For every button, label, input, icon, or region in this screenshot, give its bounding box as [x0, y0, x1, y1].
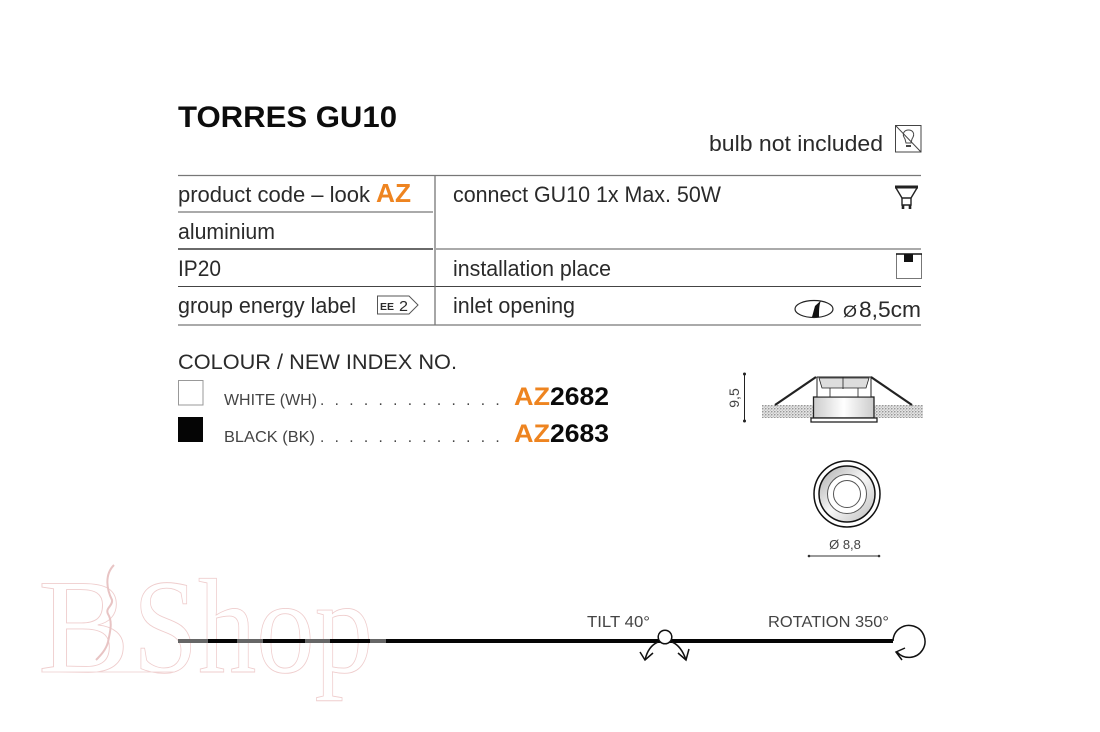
height dimension: 9,5 — [726, 388, 742, 408]
inlet opening row: inlet opening — [453, 293, 575, 318]
colour row: white: AZ — [514, 383, 550, 411]
colour row: black: AZ — [514, 420, 550, 448]
colour row: white: . . . . . . . . . . . . . — [320, 392, 507, 409]
colour row: black: 2683 — [550, 420, 609, 448]
colour row: black — [178, 417, 609, 448]
fitting body — [775, 377, 912, 422]
rotation label: ROTATION 350° — [768, 614, 889, 631]
inlet diameter value: 8,5cm — [859, 297, 921, 322]
icon: GU10 bulb — [895, 187, 918, 209]
front view drawing — [814, 461, 880, 527]
icon: energy label EE 2: EE — [380, 301, 394, 313]
adjustment axis line — [178, 639, 893, 643]
specification table — [178, 175, 922, 325]
product code row: product code – look — [178, 182, 371, 207]
bulb not included note: bulb not included — [709, 131, 883, 156]
colour row: white: 2682 — [550, 383, 609, 411]
icon: energy label EE 2: 2 — [399, 298, 408, 315]
material row: aluminium — [178, 219, 275, 244]
icon: ceiling installation — [896, 254, 922, 278]
tilt label: TILT 40° — [587, 614, 650, 631]
height dimension — [726, 372, 746, 422]
installation row: installation place — [453, 256, 611, 281]
diameter dimension — [808, 537, 880, 557]
watermark: BShop logo — [38, 553, 373, 702]
watermark: BShop logo: B — [38, 553, 130, 702]
connection row: connect GU10 1x Max. 50W — [453, 182, 721, 207]
energy label row: group energy label — [178, 293, 356, 318]
protection rating row: IP20 — [178, 256, 221, 281]
ceiling — [762, 405, 923, 418]
diameter dimension: Ø 8,8 — [829, 537, 861, 552]
icon: tilt arrows — [640, 630, 689, 660]
colour row: black: . . . . . . . . . . . . . — [320, 429, 507, 446]
icon: energy label EE 2 — [378, 296, 418, 315]
colour heading: COLOUR / NEW INDEX NO. — [178, 351, 457, 374]
inlet diameter value: Ø — [843, 302, 857, 321]
icon: inlet opening — [795, 300, 833, 318]
icon: bulb not included — [896, 126, 921, 152]
colour row: black: BLACK (BK) — [224, 429, 315, 446]
colour row: white: WHITE (WH) — [224, 392, 317, 409]
title: TORRES GU10 — [178, 101, 397, 134]
product code row: AZ — [376, 178, 411, 208]
colour row: white — [178, 380, 609, 411]
side section drawing — [726, 372, 923, 422]
icon: rotation arrow — [893, 625, 925, 660]
watermark: BShop logo: Shop — [133, 553, 373, 702]
product code row — [178, 178, 411, 208]
table rules — [178, 175, 921, 325]
